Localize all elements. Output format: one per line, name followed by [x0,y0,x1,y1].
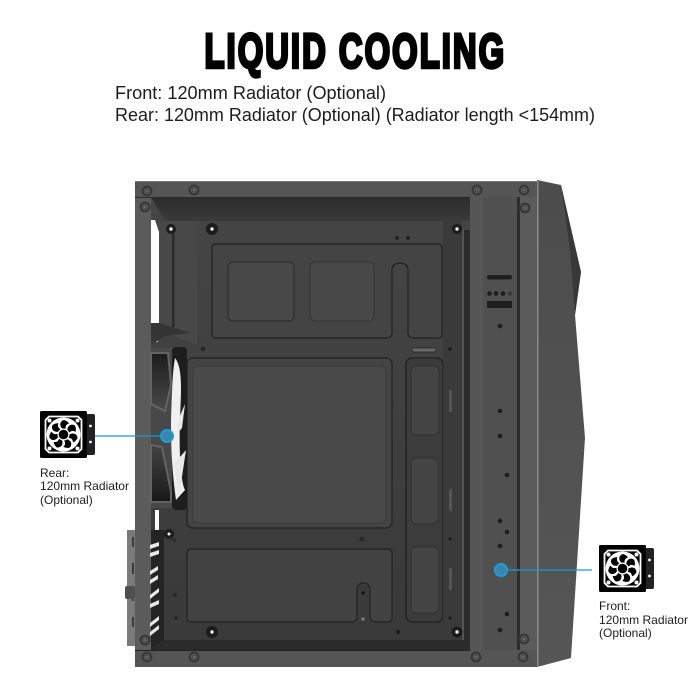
callout: rear radiator [95,430,173,442]
right strip [443,221,462,640]
standoffs [164,223,462,638]
screws [140,184,530,662]
rear label: Rear: [40,466,69,480]
front label [599,599,688,640]
rear label: 120mm Radiator [40,479,129,493]
front label: Front: [599,599,630,613]
front label: (Optional) [599,626,652,640]
specification text [115,83,595,125]
rear I/O bracket [125,530,136,646]
centre emboss panel [187,358,392,528]
case frame [135,181,537,667]
frame rails [135,181,537,667]
specification text: Rear: 120mm Radiator (Optional) (Radiator length <154mm) [115,105,595,125]
front post [470,197,483,650]
upper emboss panel [212,244,442,338]
cable bracket [151,323,191,342]
front mesh panel [483,197,520,650]
left wall strip [158,221,197,345]
interior back plate [151,197,470,650]
icon: rear radiator [40,411,95,458]
title: LIQUID COOLING [204,23,506,78]
front side panel [537,180,585,667]
rear label [40,466,129,507]
icon: front radiator [599,545,654,592]
bottom shelf [151,640,470,650]
lower emboss panel [187,549,392,622]
front label: 120mm Radiator [599,613,688,627]
right column emboss panel [406,358,443,622]
rear white openings [151,220,159,530]
expansion slot vents [150,542,159,636]
rear label: (Optional) [40,493,93,507]
callout: front radiator [495,564,592,576]
rear fan [151,347,187,510]
top shelf [151,197,470,221]
PC case illustration [125,180,585,667]
specification text: Front: 120mm Radiator (Optional) [115,83,386,103]
